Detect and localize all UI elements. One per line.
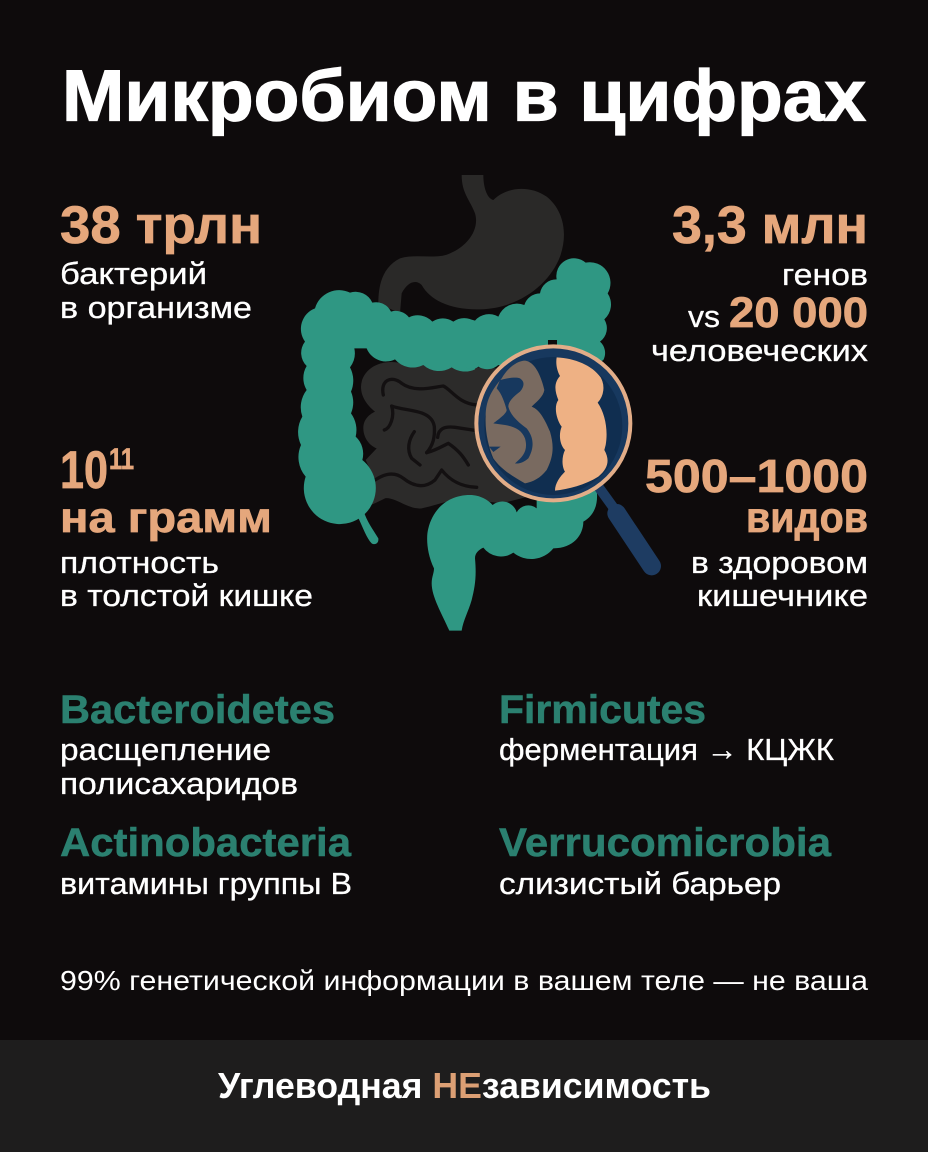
stat: species: кишечнике: [697, 578, 868, 613]
phylum: Actinobacteria: витамины группы В: [60, 866, 352, 901]
title: Микробиом в цифрах: [62, 56, 866, 136]
phylum: Firmicutes: Firmicutes: [499, 688, 706, 732]
right transverse colon: [465, 258, 611, 383]
ascending and transverse colon: [298, 290, 475, 524]
stat: genes: 3,3 млн: [672, 196, 868, 255]
phylum: Bacteroidetes: расщепление: [60, 732, 271, 767]
stat: genes: [651, 196, 869, 368]
phylum: Firmicutes: ферментация → КЦЖК: [499, 732, 834, 767]
conclusion line: 99% генетической информации в вашем теле — не ваша: [60, 965, 868, 996]
stat: species: в здоровом: [691, 545, 868, 580]
phylum: Bacteroidetes: [60, 688, 335, 801]
stat: species: [645, 450, 868, 613]
magnifier handle: [598, 487, 652, 566]
phylum: Verrucomicrobia: Verrucomicrobia: [499, 821, 832, 865]
appendix: [358, 510, 378, 544]
small intestine: [361, 362, 528, 508]
stomach: [378, 175, 564, 313]
stat: bacteria count: [60, 196, 262, 325]
footer brand: Углеводная НЕзависимость: [218, 1065, 711, 1106]
phylum: Firmicutes: [499, 688, 834, 767]
stat: density: на грамм: [60, 494, 272, 542]
colon: [298, 258, 611, 631]
footer band: [0, 1040, 928, 1152]
phylum: Actinobacteria: Actinobacteria: [60, 821, 352, 865]
phylum: Actinobacteria: [60, 821, 352, 901]
stat: genes: генов: [782, 257, 868, 292]
stat: species: 500–1000: [645, 450, 868, 502]
phylum: Verrucomicrobia: слизистый барьер: [499, 866, 781, 901]
stat: genes: 20 000: [729, 289, 868, 337]
stat: density: 10: [60, 441, 108, 500]
stat: species: видов: [746, 494, 868, 542]
stat: density: плотность: [60, 545, 219, 580]
descending and sigmoid colon: [427, 490, 597, 631]
magnified colon wall: [555, 357, 608, 491]
stat: genes: человеческих: [651, 333, 869, 368]
stat: bacteria count: бактерий: [60, 256, 207, 291]
stat: density: 11: [109, 443, 134, 476]
phylum: Verrucomicrobia: [499, 821, 832, 901]
stat: bacteria count: 38 трлн: [60, 196, 262, 255]
phylum: Bacteroidetes: полисахаридов: [60, 766, 298, 801]
stat: density: в толстой кишке: [60, 578, 313, 613]
magnified small intestine: [486, 361, 553, 483]
stat: density: [60, 441, 313, 613]
stat: bacteria count: в организме: [60, 290, 252, 325]
phylum: Bacteroidetes: Bacteroidetes: [60, 688, 335, 732]
stat: genes: vs: [688, 299, 720, 334]
anatomy illustration: digestive tract with magnifier: [298, 175, 652, 631]
magnifier lens: [476, 346, 630, 500]
